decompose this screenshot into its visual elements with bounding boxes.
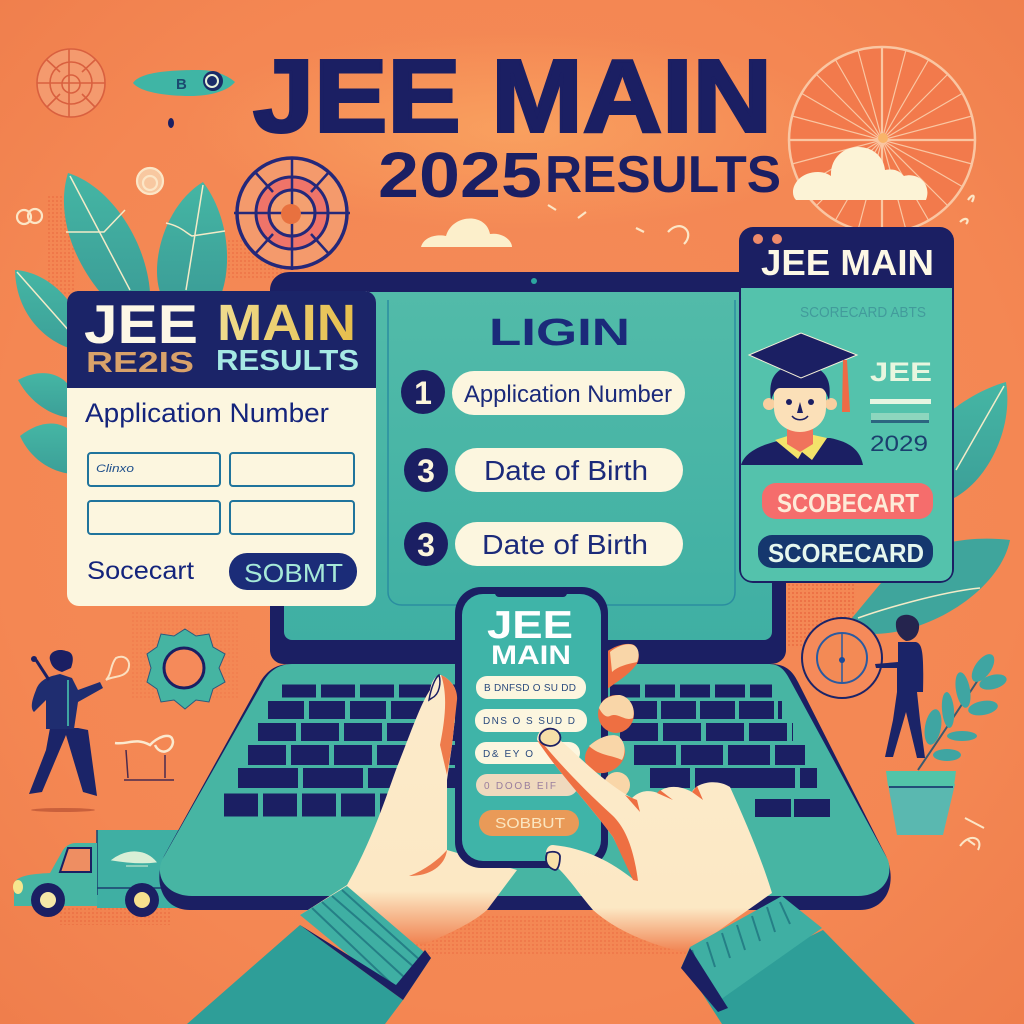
faded caption: SCORECARD ABTS: [800, 304, 926, 321]
laptop keyboard keys: [224, 691, 830, 808]
graduate avatar: [741, 333, 863, 465]
login row: date of birth repeat: 3: [417, 527, 435, 563]
icon: potted plant: [886, 650, 1008, 835]
scorecard label: Socecart: [87, 557, 194, 585]
button: scorecard: SCORECARD: [768, 538, 924, 568]
laptop screen frame: [270, 272, 786, 664]
login row: application number: [401, 370, 685, 415]
panel: right scorecard: [739, 227, 954, 583]
icon: top left radial circle: [37, 49, 105, 117]
phone heading: [487, 604, 573, 670]
card heading: JEE MAIN: [761, 242, 934, 283]
fingernails: [539, 729, 560, 870]
phone form pills: [475, 676, 587, 796]
fingers over phone edge: [578, 695, 634, 798]
submit button: SOBMT: [244, 558, 343, 588]
card header: [67, 291, 376, 388]
left sleeve: [187, 886, 431, 1024]
card header: MAIN: [217, 294, 356, 351]
login row: date of birth repeat: [404, 522, 683, 566]
submit button: [229, 553, 357, 590]
card header: RESULTS: [216, 345, 359, 377]
phone submit button: SOBBUT: [495, 815, 565, 832]
title: RESULTS: [545, 146, 781, 204]
side label: JEE 2029: 2029: [870, 431, 928, 456]
title: JEE MAIN: [253, 38, 772, 154]
right sleeve: [681, 896, 915, 1024]
icon: target circle: [234, 157, 350, 270]
form input fields: [88, 453, 354, 534]
laptop base: [159, 664, 891, 910]
icon: large cloud: [793, 147, 927, 200]
side label: JEE 2029: [870, 357, 932, 456]
title: 2025: [378, 139, 542, 211]
login row: date of birth: 3: [417, 453, 435, 489]
side label: JEE 2029: JEE: [870, 357, 932, 387]
phone heading: JEE: [487, 604, 573, 647]
left hand thumb shading: [409, 675, 457, 876]
icon: sun rays circle: [789, 47, 975, 233]
login heading: LIGIN: [489, 312, 630, 354]
icon: left leaves: [15, 173, 227, 474]
phone submit button: [479, 810, 579, 836]
left hand: [300, 675, 517, 945]
login row: date of birth: Date of Birth: [484, 455, 648, 486]
small floating doodles: [17, 168, 974, 244]
card header: JEE: [84, 293, 198, 355]
icon: teal pill with swirl: [133, 70, 235, 128]
phone form pills: DNS O S SUD D: [483, 716, 575, 727]
login row: application number: 1: [414, 375, 432, 411]
laptop screen: [284, 278, 772, 640]
phone: [455, 587, 608, 868]
figure: left person: [29, 650, 129, 812]
top finger behind phone: [606, 644, 639, 690]
icon: teal pill with swirl: B: [176, 76, 187, 93]
right hand: [537, 727, 772, 953]
form input fields: Clinxo: [96, 463, 134, 475]
window dots: [753, 234, 782, 244]
phone form pills: D& EY O: [483, 749, 533, 760]
title: [253, 38, 781, 211]
login row: application number: Application Number: [464, 381, 672, 408]
icon: right leaves: [852, 382, 1010, 634]
card header: RE2IS: [86, 347, 194, 379]
icon: gear: [147, 629, 225, 709]
phone form pills: B DNFSD O SU DD: [484, 683, 576, 694]
laptop: [159, 272, 891, 910]
application number label: Application Number: [85, 398, 329, 428]
phone form pills: 0 DOOB EIF: [484, 781, 556, 792]
login row: date of birth repeat: Date of Birth: [482, 529, 648, 560]
login row: date of birth: [404, 448, 683, 492]
button: scoecart: SCOBECART: [777, 488, 919, 518]
phone heading: MAIN: [491, 640, 571, 670]
icon: delivery truck: [13, 830, 187, 917]
icon: small cloud: [421, 218, 512, 247]
panel: left application card: [67, 291, 376, 606]
icon: small desk: [115, 736, 174, 780]
figure: right person with target: [802, 615, 925, 758]
small right doodles: [960, 818, 984, 850]
